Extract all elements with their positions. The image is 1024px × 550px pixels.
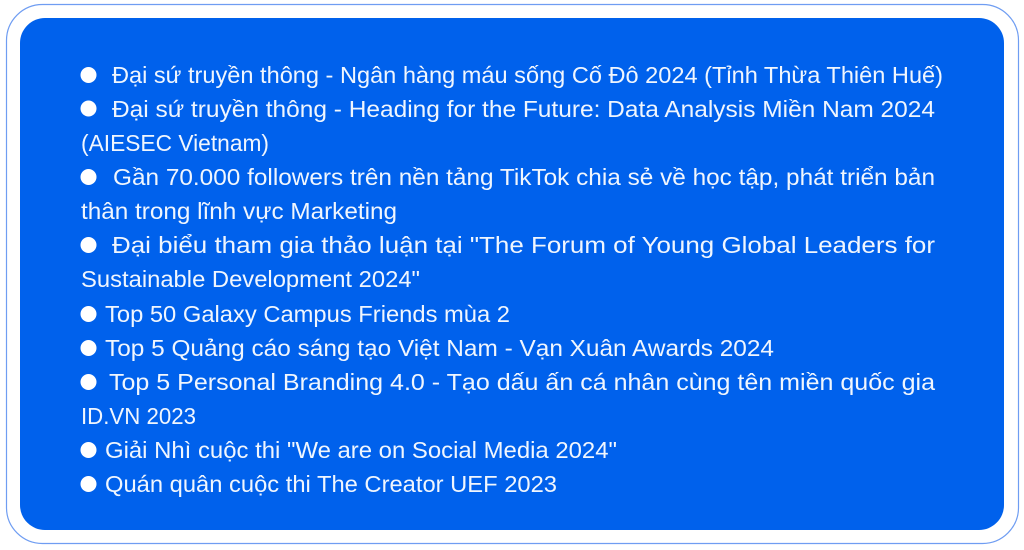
list item: Galaxy Campus Friends: Top 50 Galaxy Campus Friends mùa 2 xyxy=(105,301,510,327)
list item: TikTok followers: Gần 70.000 followers trên nền tảng TikTok chia sẻ về học tập, phát triển bản xyxy=(113,164,935,190)
list item: Heading for the Future xyxy=(80,96,935,156)
list item: Personal Branding xyxy=(80,369,935,429)
list item: Heading for the Future: (AIESEC Vietnam) xyxy=(81,130,269,156)
list item: We are on Social Media: Giải Nhì cuộc thi "We are on Social Media 2024" xyxy=(105,437,617,463)
list item: Forum of Young Global Leaders: Đại biểu tham gia thảo luận tại "The Forum of Young Global Leaders for xyxy=(112,232,935,258)
list item: Ngân hàng máu sống Cố Đô: Đại sứ truyền thông - Ngân hàng máu sống Cố Đô 2024 (Tỉnh Thừa Thiên Huế) xyxy=(112,62,943,88)
list item: Personal Branding: ID.VN 2023 xyxy=(81,403,196,429)
list item: Vạn Xuân Awards: Top 5 Quảng cáo sáng tạo Việt Nam - Vạn Xuân Awards 2024 xyxy=(105,335,774,361)
list item: TikTok followers xyxy=(80,164,935,224)
list item: The Creator UEF: Quán quân cuộc thi The Creator UEF 2023 xyxy=(105,471,557,497)
list item: Personal Branding: Top 5 Personal Branding 4.0 - Tạo dấu ấn cá nhân cùng tên miền quốc gia xyxy=(109,369,935,395)
list item: TikTok followers: thân trong lĩnh vực Marketing xyxy=(81,198,397,224)
list item: Forum of Young Global Leaders: Sustainable Development 2024" xyxy=(81,266,420,292)
list item: Heading for the Future: Đại sứ truyền thông - Heading for the Future: Data Analysis Miền Nam 2024 xyxy=(112,96,935,122)
list item: Forum of Young Global Leaders xyxy=(80,232,935,292)
